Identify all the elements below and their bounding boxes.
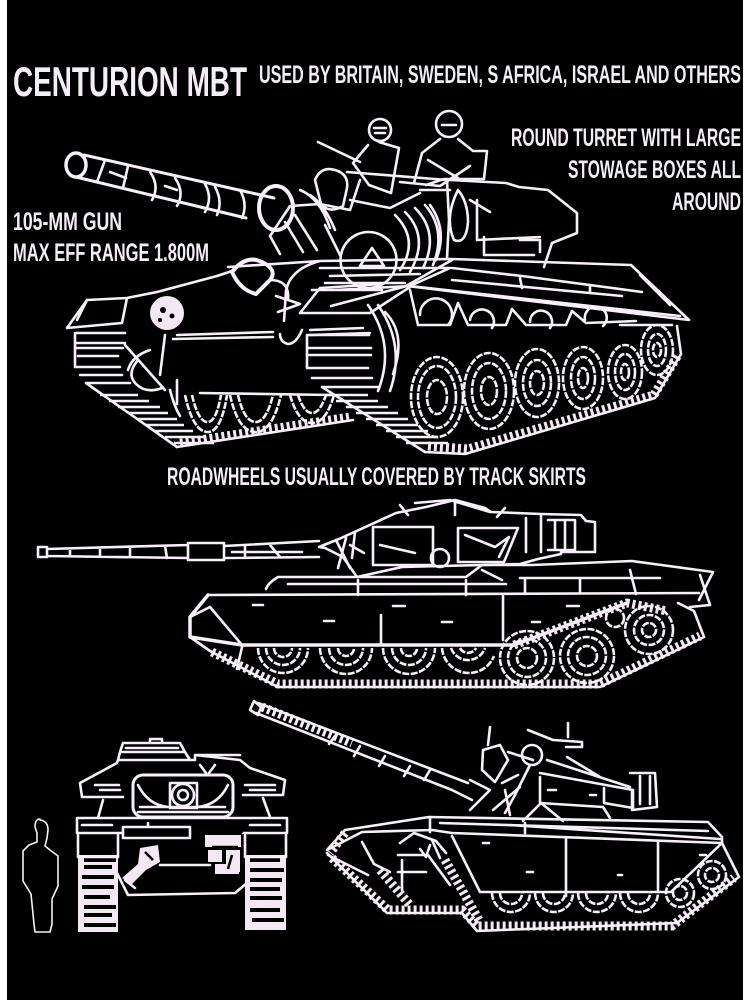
front hull details	[122, 832, 243, 884]
left track	[67, 270, 370, 447]
human scale figure	[23, 819, 58, 932]
side turret	[319, 500, 595, 577]
front turret	[80, 739, 285, 818]
lower gun barrel	[250, 701, 468, 790]
front view tank	[77, 739, 287, 932]
side roadwheels	[258, 606, 673, 685]
annotation: gun: MAX EFF RANGE 1.800M	[13, 239, 209, 267]
annotation: turret	[511, 124, 741, 216]
front tracks	[78, 835, 286, 932]
right track and roadwheels	[300, 284, 681, 454]
lower roadwheels	[492, 861, 726, 912]
annotation: gun	[13, 208, 209, 267]
side armour marks	[253, 605, 579, 622]
title: CENTURION MBT	[13, 58, 247, 105]
main tank: three-quarter view	[66, 111, 689, 454]
lower track	[327, 833, 739, 931]
lower turret	[452, 723, 657, 821]
side hull and fender	[190, 561, 713, 645]
lower right tank	[250, 701, 739, 931]
hull deck	[228, 259, 689, 321]
gun barrel	[66, 153, 293, 230]
side track	[190, 603, 704, 687]
front hull	[77, 818, 287, 895]
side gun barrel	[38, 541, 319, 560]
turret	[270, 166, 577, 288]
lower hull side	[328, 833, 722, 896]
annotation: gun: 105-MM GUN	[13, 208, 122, 236]
side view tank	[38, 500, 713, 687]
lower hull deck	[327, 817, 722, 850]
crew	[318, 111, 487, 193]
